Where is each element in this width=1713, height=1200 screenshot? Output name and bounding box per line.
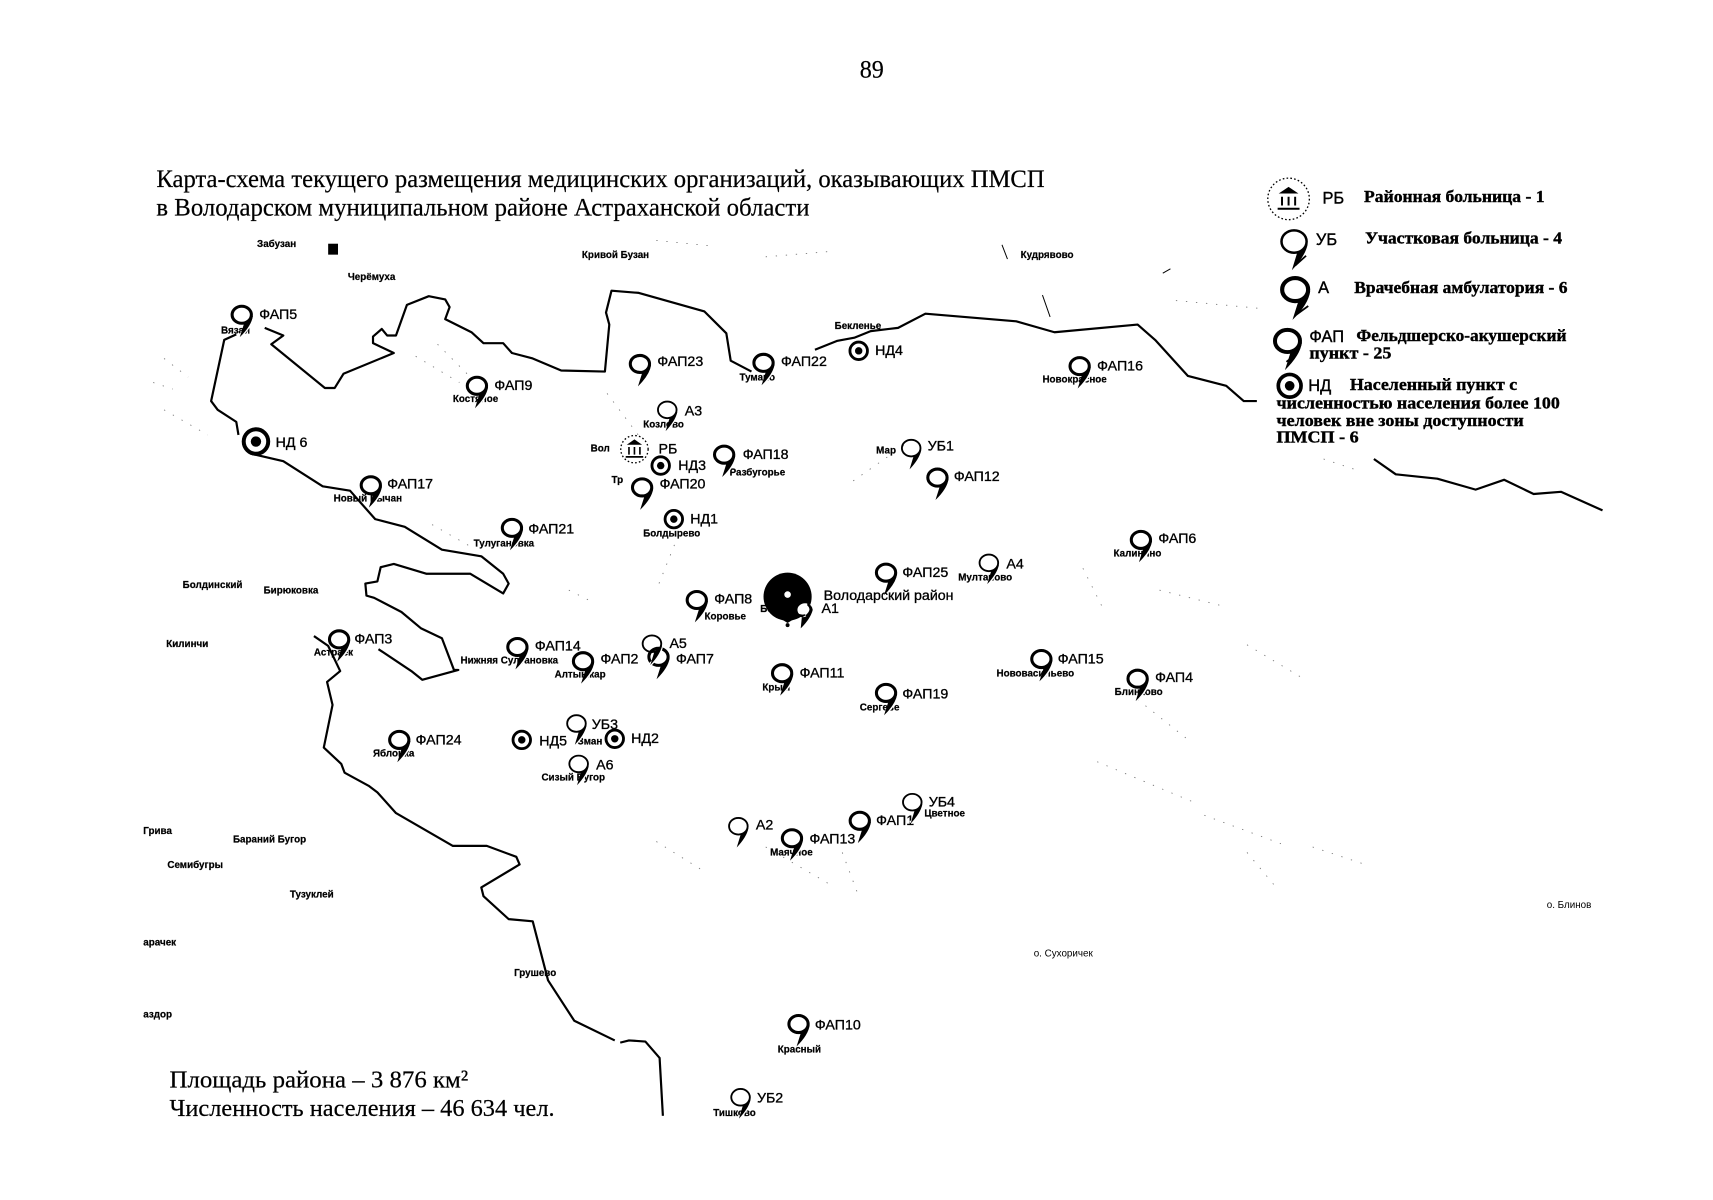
settlement names: Калинино	[1114, 548, 1161, 559]
settlement names: Сизый Бугор	[541, 772, 605, 783]
ФАП markers: ФАП4	[1155, 670, 1193, 686]
district statistics	[170, 1066, 555, 1122]
settlement names: Новый Рычан	[334, 494, 402, 505]
settlement names: Алтынжар	[555, 670, 606, 681]
settlement names: Красный	[778, 1044, 821, 1055]
icon: Volodarsky district centre: Володарский район	[824, 588, 954, 604]
icon: Volodarsky district centre: Бо	[760, 604, 773, 615]
settlement names: Сергеье	[860, 702, 900, 713]
settlement names: Бараний Бугор	[233, 835, 306, 846]
settlement names: Тумано	[739, 372, 775, 383]
icon: district hospital	[621, 436, 677, 463]
legend: rural hospital: УБ	[1316, 231, 1337, 249]
ФАП markers	[232, 306, 1196, 1046]
legend: outpatient clinic: А	[1318, 279, 1329, 297]
icon: Volodarsky district centre: А1	[821, 601, 839, 617]
district statistics: Площадь района – 3 876 км²	[170, 1066, 468, 1093]
ФАП markers: ФАП17	[387, 477, 433, 493]
district statistics: Численность населения – 46 634 чел.	[170, 1095, 555, 1122]
settlement names: Грива	[143, 826, 172, 837]
А and УБ markers: А2	[756, 818, 773, 834]
settlement names: Кудрявово	[1021, 250, 1074, 261]
settlement names: Козлово	[643, 419, 684, 430]
settlement names: Мар	[876, 446, 896, 457]
settlement names: Мултаново	[958, 572, 1012, 583]
НД markers: НД1	[690, 512, 718, 527]
settlement names	[143, 239, 1591, 1119]
ФАП markers: ФАП24	[416, 732, 462, 748]
district border: north	[211, 291, 1603, 510]
settlement names: Астраек	[314, 648, 353, 659]
legend: rural hospital: Участковая больница - 4	[1365, 229, 1562, 248]
icon: Volodarsky district centre	[760, 573, 954, 628]
settlement names: Цветное	[924, 808, 966, 819]
title: Карта-схема текущего размещения медицинских организаций, оказывающих ПМСП	[156, 164, 1045, 193]
settlement names: Костяное	[453, 394, 499, 405]
title	[156, 164, 1045, 221]
А and УБ markers: УБ1	[928, 438, 954, 454]
settlement names: Тр	[611, 475, 623, 486]
НД markers: НД5	[539, 733, 567, 749]
settlement names: Новокрасное	[1042, 375, 1107, 386]
settlement names: Блинково	[1115, 687, 1163, 698]
ФАП markers: ФАП12	[954, 469, 1000, 485]
settlement names: Вязай	[221, 325, 250, 336]
ФАП markers: ФАП14	[535, 638, 581, 654]
settlement names: Семибугры	[167, 860, 223, 871]
legend: settlement outside access zone: численностью населения более 100	[1277, 394, 1560, 413]
НД markers: НД 6	[276, 435, 307, 451]
settlement names: аздор	[143, 1009, 172, 1020]
legend: outpatient clinic: Врачебная амбулатория - 6	[1354, 278, 1568, 297]
settlement names: Крым	[762, 683, 790, 694]
settlement names: Черёмуха	[348, 272, 396, 283]
settlement names: Тузуклей	[290, 889, 334, 900]
А and УБ markers: УБ4	[929, 795, 955, 811]
ФАП markers: ФАП19	[902, 686, 948, 702]
legend: settlement outside access zone: Населенный пункт с	[1350, 375, 1517, 394]
ФАП markers: ФАП21	[528, 521, 574, 537]
legend: settlement outside access zone: человек вне зоны доступности	[1277, 411, 1524, 430]
settlement names: Болдинский	[183, 580, 242, 591]
ФАП markers: ФАП1	[876, 813, 914, 829]
settlement names: Грушево	[514, 968, 556, 979]
ФАП markers: ФАП10	[815, 1018, 861, 1034]
icon: district hospital: РБ	[659, 442, 677, 458]
ФАП markers: ФАП7	[676, 651, 714, 667]
settlement names: Коровье	[704, 612, 747, 623]
ФАП markers: ФАП18	[743, 447, 789, 463]
legend: settlement outside access zone: НД	[1308, 377, 1331, 395]
ФАП markers: ФАП16	[1097, 358, 1143, 374]
settlement names: о. Сухоричек	[1034, 948, 1093, 959]
settlement names: Тишково	[713, 1108, 756, 1119]
title: в Володарском муниципальном районе Астраханской области	[156, 192, 810, 221]
legend: feldsher-midwife station: ФАП	[1309, 328, 1344, 346]
page number: 89	[860, 57, 884, 84]
settlement names: Болдырево	[643, 529, 700, 540]
legend: settlement outside access zone	[1277, 374, 1560, 447]
settlement names: Нижняя Султановка	[461, 655, 559, 666]
settlement names: Бекленье	[835, 321, 882, 332]
А and УБ markers: А3	[685, 403, 702, 419]
legend: feldsher-midwife station: Фельдшерско-акушерский	[1356, 326, 1567, 345]
settlement names: Забузан	[257, 239, 296, 250]
ФАП markers: ФАП11	[800, 666, 844, 682]
ФАП markers: ФАП20	[660, 477, 706, 493]
icon: Zabuzan marker	[328, 244, 338, 255]
settlement names: Нововасильево	[997, 669, 1074, 680]
settlement names: Яблонка	[373, 748, 415, 759]
legend: district hospital	[1268, 178, 1545, 220]
А and УБ markers: УБ3	[592, 717, 618, 733]
settlement names: Бирюковка	[264, 585, 319, 596]
ФАП markers: ФАП3	[354, 632, 392, 648]
legend: settlement outside access zone: ПМСП - 6	[1277, 428, 1359, 447]
ФАП markers: ФАП25	[902, 565, 948, 581]
settlement names: арачек	[143, 937, 176, 948]
legend: feldsher-midwife station	[1275, 326, 1567, 370]
settlement names: Килинчи	[166, 639, 208, 650]
legend: district hospital: Районная больница - 1	[1364, 187, 1545, 206]
НД markers: НД3	[678, 458, 706, 474]
legend: outpatient clinic	[1282, 278, 1568, 320]
А and УБ markers: А6	[596, 757, 614, 773]
ФАП markers: ФАП9	[494, 378, 532, 394]
settlement names: о. Блинов	[1547, 900, 1591, 911]
ФАП markers: ФАП23	[657, 354, 703, 370]
ФАП markers: ФАП6	[1158, 531, 1196, 547]
ФАП markers: ФАП8	[714, 591, 752, 607]
legend: rural hospital	[1281, 229, 1562, 270]
settlement names: Разбугорье	[730, 467, 786, 478]
legend	[1268, 178, 1568, 447]
legend: feldsher-midwife station: пункт - 25	[1309, 343, 1391, 362]
А and УБ markers: А5	[669, 636, 687, 652]
settlement names: Зман	[578, 736, 602, 747]
settlement names: Кривой Бузан	[582, 250, 649, 261]
settlement names: Маячное	[770, 848, 813, 859]
А and УБ markers: УБ2	[757, 1091, 783, 1107]
settlement names: Тулугановка	[474, 538, 535, 549]
faint map details	[153, 240, 1362, 896]
А and УБ markers: А4	[1006, 556, 1024, 572]
district border: west and south	[250, 454, 663, 1116]
ФАП markers: ФАП22	[781, 354, 827, 370]
ФАП markers: ФАП15	[1058, 651, 1104, 667]
НД markers: НД4	[875, 343, 903, 359]
ФАП markers: ФАП13	[809, 832, 855, 848]
ФАП markers: ФАП2	[601, 651, 639, 667]
legend: district hospital: РБ	[1322, 189, 1344, 207]
НД markers: НД2	[631, 731, 659, 747]
ФАП markers: ФАП5	[259, 307, 297, 323]
НД markers	[244, 342, 903, 749]
settlement names: Вол	[591, 443, 610, 454]
А and УБ markers	[567, 402, 1024, 1119]
